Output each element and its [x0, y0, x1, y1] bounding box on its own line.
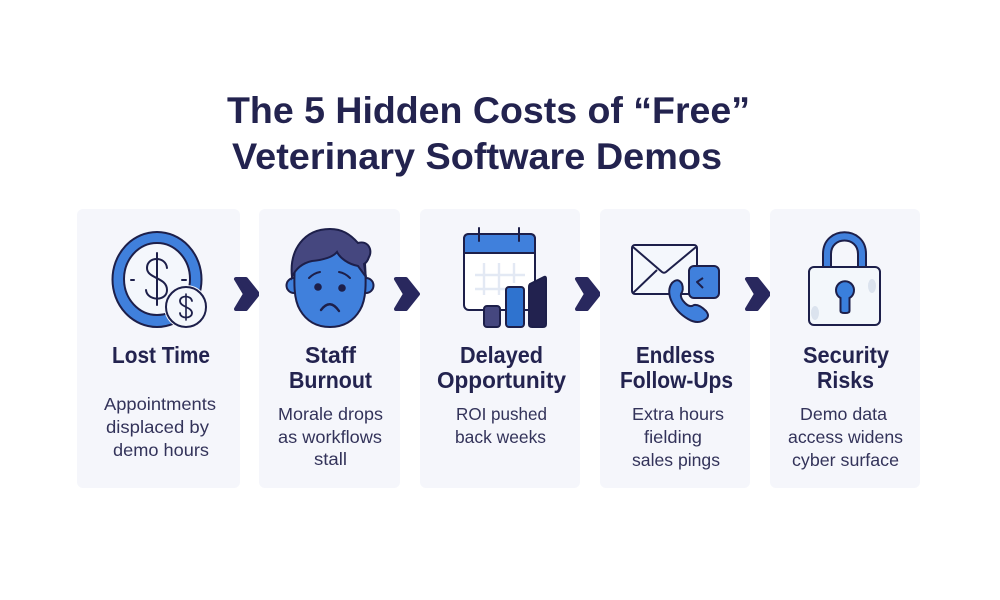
text: lost time description: Appointments: [104, 394, 216, 414]
heading: staff burnout: [289, 342, 372, 393]
text: endless follow-ups description: fielding: [644, 427, 702, 447]
text: security risks description: access widens: [788, 427, 903, 447]
text: endless follow-ups description: sales pings: [632, 450, 720, 470]
icon: envelope and phone: [632, 245, 719, 322]
text: staff burnout description: stall: [314, 449, 347, 469]
heading: delayed opportunity: Delayed: [460, 342, 543, 368]
text: delayed opportunity description: ROI pushed: [456, 404, 547, 424]
heading: endless follow-ups: Endless: [636, 342, 715, 368]
heading: delayed opportunity: Opportunity: [437, 367, 566, 393]
text: delayed opportunity description: [455, 404, 547, 447]
panel: security risks: [770, 209, 920, 488]
text: security risks description: Demo data: [800, 404, 887, 424]
text: security risks description: cyber surface: [792, 450, 899, 470]
arrow 4: [747, 279, 769, 309]
text: staff burnout description: [278, 404, 383, 469]
panel: endless follow-ups: [600, 209, 750, 488]
arrow 3: [577, 279, 599, 309]
heading: staff burnout: Staff: [305, 342, 356, 368]
text: endless follow-ups description: Extra hours: [632, 404, 724, 424]
text: lost time description: [104, 394, 216, 460]
arrow 2: [396, 279, 418, 309]
title: The 5 Hidden Costs of “Free”: [227, 90, 750, 131]
icon: padlock: [809, 232, 880, 325]
title: Veterinary Software Demos: [232, 136, 722, 177]
text: staff burnout description: as workflows: [278, 427, 382, 447]
heading: endless follow-ups: [620, 342, 733, 393]
title: [227, 90, 750, 177]
icon: clock with dollar coin: [112, 232, 208, 329]
text: security risks description: [788, 404, 903, 470]
icon: calendar with bars: [464, 228, 546, 327]
text: lost time description: demo hours: [113, 440, 209, 460]
panel: staff burnout: [259, 209, 400, 488]
heading: security risks: Risks: [817, 367, 874, 393]
text: endless follow-ups description: [632, 404, 724, 470]
heading: staff burnout: Burnout: [289, 367, 372, 393]
arrow 1: [236, 279, 258, 309]
text: lost time description: displaced by: [106, 417, 209, 437]
text: staff burnout description: Morale drops: [278, 404, 383, 424]
text: delayed opportunity description: back weeks: [455, 427, 546, 447]
icon: worried face: [286, 229, 374, 327]
heading: security risks: [803, 342, 889, 393]
heading: security risks: Security: [803, 342, 889, 368]
panel: delayed opportunity: [420, 209, 580, 488]
heading: lost time: Lost Time: [112, 342, 210, 368]
heading: delayed opportunity: [437, 342, 566, 393]
panel: lost time: [77, 209, 240, 488]
heading: endless follow-ups: Follow-Ups: [620, 367, 733, 393]
